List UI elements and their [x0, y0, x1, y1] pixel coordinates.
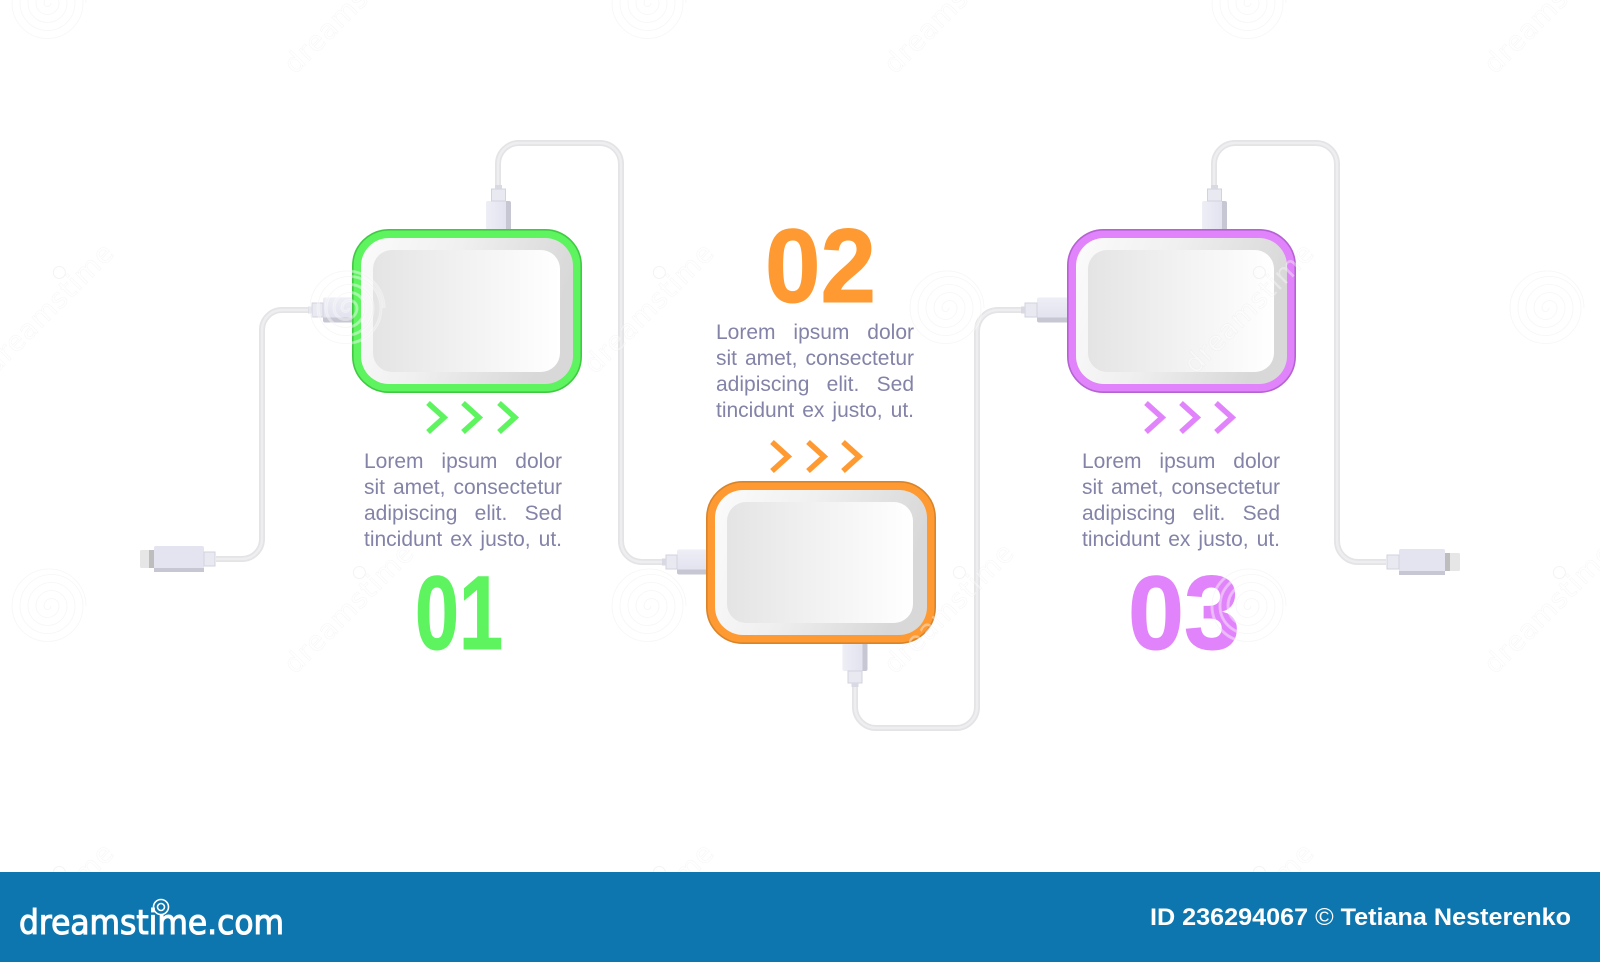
- connector: green left: [308, 298, 354, 322]
- number 01: 01: [415, 555, 503, 672]
- connector: purple top: [1202, 185, 1227, 231]
- text block 2: tincidunt ex justo, ut.: [716, 399, 914, 422]
- text block 1: sit amet, consectetur: [364, 476, 562, 499]
- text block 2: sit amet, consectetur: [716, 347, 914, 370]
- text block 3: sit amet, consectetur: [1082, 476, 1280, 499]
- text block 2: [716, 321, 914, 422]
- number 02: 02: [765, 208, 876, 325]
- number 03: 03: [1128, 555, 1240, 672]
- connector: purple left: [1021, 298, 1069, 322]
- text block 1: [364, 450, 562, 551]
- text block 3: [1082, 450, 1280, 551]
- cable: left plug to green box: [216, 310, 312, 559]
- image id and author credit: ID 236294067 © Tetiana Nesterenko: [1150, 904, 1571, 931]
- plug: left lightning connector: [140, 546, 215, 572]
- cable: purple box to right plug: [1214, 143, 1386, 562]
- text block 3: adipiscing elit. Sed: [1082, 502, 1280, 525]
- text block 1: tincidunt ex justo, ut.: [364, 528, 562, 551]
- connector: orange left: [662, 550, 708, 574]
- cable: green box to orange box: [498, 143, 664, 562]
- arrows: orange chevrons: [772, 442, 859, 471]
- text block 2: adipiscing elit. Sed: [716, 373, 914, 396]
- panel: purple charger: [1068, 230, 1295, 392]
- cable: orange box to purple box: [855, 310, 1024, 728]
- connector: green top: [486, 185, 511, 231]
- plug: right lightning connector: [1387, 549, 1460, 575]
- arrows: purple chevrons: [1146, 403, 1232, 432]
- panel: orange charger: [707, 482, 935, 643]
- text block 1: Lorem ipsum dolor: [364, 450, 562, 473]
- text block 2: Lorem ipsum dolor: [716, 321, 914, 344]
- connector: orange bottom: [842, 642, 868, 687]
- text block 3: tincidunt ex justo, ut.: [1082, 528, 1280, 551]
- footer bar: [0, 872, 1600, 962]
- logo spiral icon: [154, 900, 168, 914]
- arrows: green chevrons: [428, 403, 515, 432]
- text block 1: adipiscing elit. Sed: [364, 502, 562, 525]
- logo text: dreamstime.com: [19, 903, 284, 943]
- panel: green charger: [353, 230, 581, 392]
- text block 3: Lorem ipsum dolor: [1082, 450, 1280, 473]
